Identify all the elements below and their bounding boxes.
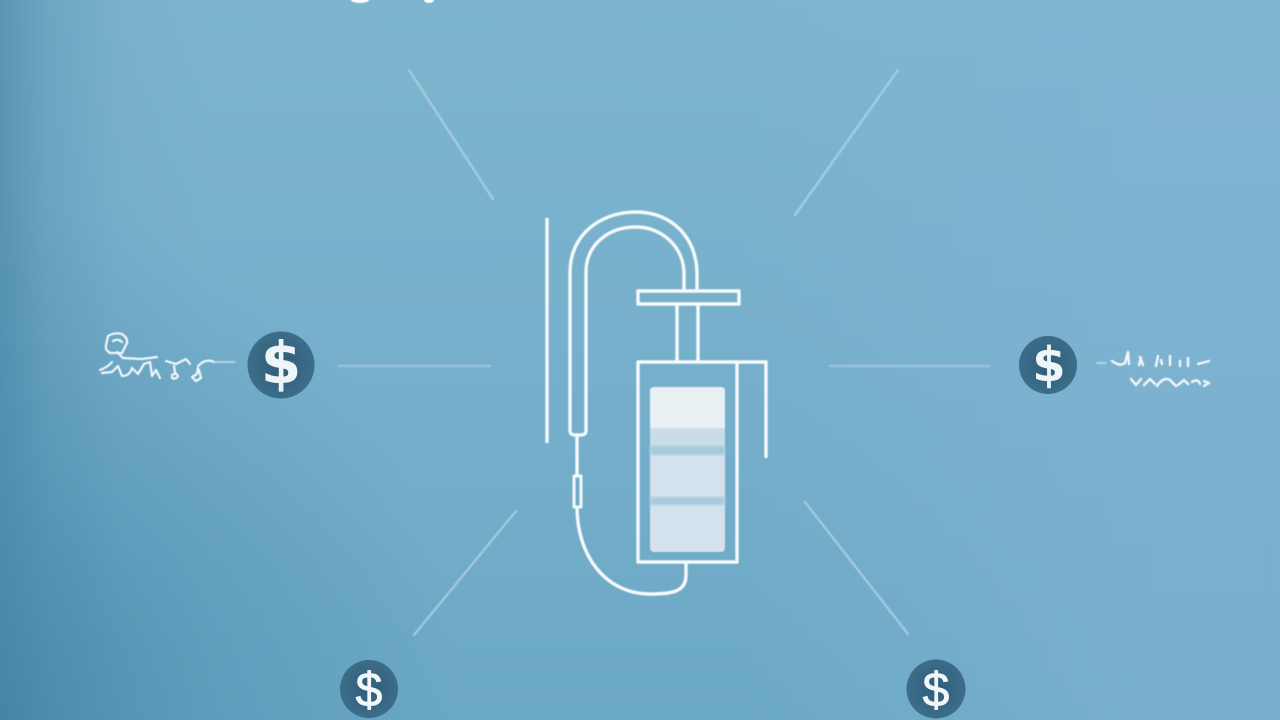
- dollar icon: right: [1019, 336, 1077, 394]
- connector lines radiating from the device: [339, 70, 989, 635]
- dollar icon: right: $: [1032, 337, 1066, 393]
- dollar icon: bottom right: $: [923, 664, 949, 717]
- bag fluid panel: [650, 387, 725, 552]
- stem: [677, 304, 698, 361]
- side outlet: [737, 362, 766, 458]
- illegible label: right: [1097, 352, 1209, 386]
- central icon: drainage bag with tube: [547, 212, 766, 594]
- illegible label: left: [100, 333, 235, 381]
- thin lower tube: [577, 435, 686, 594]
- outer and inner hooked tube: [570, 212, 697, 432]
- side rule: [545, 218, 549, 443]
- dollar icon: left: $: [261, 329, 301, 397]
- dollar icon: bottom left: [340, 660, 398, 718]
- dollar icon: bottom left: $: [356, 664, 382, 717]
- tube clamp: [574, 476, 581, 507]
- cropped title fragments at top edge: [351, 0, 434, 3]
- bag frame: [638, 362, 737, 562]
- dollar icon: left: [248, 329, 314, 398]
- dollar icon: bottom right: [906, 660, 966, 718]
- top cross bar: [638, 291, 739, 304]
